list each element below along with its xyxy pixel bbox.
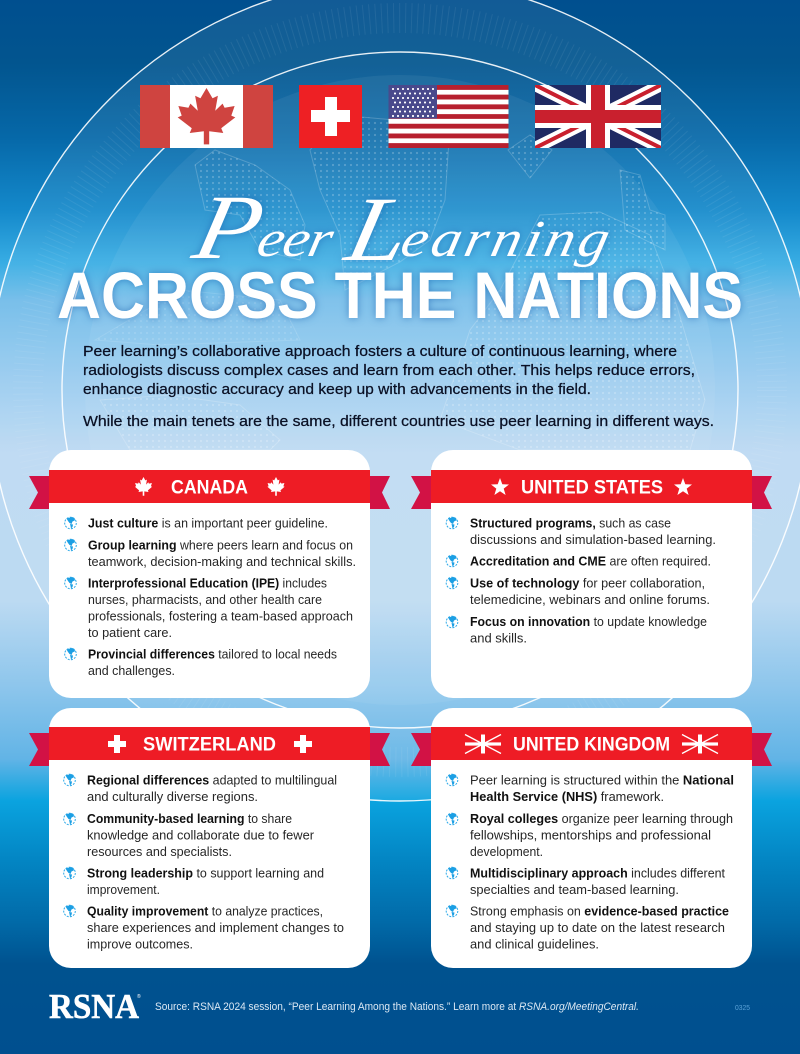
bullet: royal colleges: fellowships, mentorships and professional: [470, 828, 711, 842]
bullet: technology: telemedicine, webinars and online forums.: [470, 593, 710, 607]
bullet: technology: Use of technology for peer collaboration,: [470, 576, 705, 590]
title: ACROSS THE NATIONS: [57, 258, 743, 332]
flag: United States: [388, 85, 508, 148]
intro text: Peer learning’s collaborative approach fosters a culture of continuous learning, where: [83, 343, 677, 360]
script title line: earning: [396, 211, 619, 268]
globe backdrop with rings and dotted map: [0, 0, 800, 801]
bullet: provincial differences: [65, 648, 337, 678]
flag: United Kingdom: [535, 85, 661, 148]
logo: RSNA: ®: [137, 993, 141, 1000]
flag: Canada: [140, 85, 273, 148]
bullet: quality improvement: [64, 904, 344, 952]
title: [57, 176, 743, 332]
bullet: interprofessional education: [65, 576, 353, 640]
bullet: multidisciplinary approach: [446, 866, 725, 897]
script title line: L: [336, 178, 419, 280]
bullet: regional differences: Regional differences adapted to multilingual: [87, 774, 337, 788]
bullet: quality improvement: share experiences and implement changes to: [87, 921, 344, 935]
script title line: P: [184, 176, 273, 278]
bullet: strong leadership: [64, 866, 324, 897]
panel: United States: UNITED STATES: [521, 478, 663, 498]
bullet: strong leadership: improvement.: [87, 883, 160, 897]
icon: stars: [491, 478, 692, 495]
panel: Canada: [29, 450, 390, 698]
bullet: community-based learning: knowledge and collaborate due to fewer: [87, 828, 314, 842]
panel: Switzerland: SWITZERLAND: [143, 734, 276, 756]
bullet: group learning: teamwork, decision-making and technical skills.: [88, 555, 356, 569]
intro text: enhance diagnostic accuracy and keep up with advancements in the field.: [83, 381, 591, 398]
bullet: structured programs: Structured programs, such as case: [470, 516, 671, 530]
bullet: technology: [446, 576, 710, 607]
bullet: structured programs: [446, 516, 716, 547]
bullet: regional differences: and culturally diverse regions.: [87, 790, 258, 804]
bullet: quality improvement: Quality improvement to analyze practices,: [87, 904, 323, 918]
panel: United Kingdom: [411, 708, 772, 968]
panel: Switzerland: [29, 708, 390, 968]
panel: United States: [411, 450, 772, 698]
bullet: NHS framework: Peer learning is structured within the National: [470, 774, 734, 788]
bullet: innovation: and skills.: [470, 632, 527, 646]
intro text: radiologists discuss complex cases and learn from each other. This helps reduce errors,: [83, 362, 695, 379]
bullet: community-based learning: resources and specialists.: [87, 845, 232, 859]
bullet: royal colleges: Royal colleges organize peer learning through: [470, 812, 733, 826]
panel: Canada: CANADA: [171, 478, 248, 498]
bullet: community-based learning: Community-based learning to share: [87, 812, 292, 826]
bullet: NHS framework: Health Service (NHS) framework.: [470, 790, 664, 804]
bullet: accreditation: Accreditation and CME are often required.: [470, 554, 711, 568]
bullet: multidisciplinary approach: Multidisciplinary approach includes different: [470, 866, 725, 880]
panel: United Kingdom: UNITED KINGDOM: [513, 734, 670, 756]
bullet: evidence-based practice: Strong emphasis on evidence-based practice: [470, 904, 729, 918]
bullet: interprofessional education: to patient care.: [88, 626, 172, 640]
bullet: just culture: Just culture is an important peer guideline.: [88, 516, 328, 530]
bullet: royal colleges: development.: [470, 845, 543, 859]
bullet: evidence-based practice: and staying up to date on the latest research: [470, 921, 725, 935]
bullet: provincial differences: Provincial differences tailored to local needs: [88, 648, 337, 662]
source text: Source: RSNA 2024 session, “Peer Learning Among the Nations.” Learn more at RSNA.org/MeetingCentral.: [155, 1001, 639, 1013]
icon: union flags: [465, 734, 718, 754]
bullet: royal colleges: [446, 812, 733, 859]
bullet: group learning: Group learning where peers learn and focus on: [88, 538, 353, 552]
logo: RSNA: RSNA: [49, 987, 140, 1026]
issue code: 0325: [735, 1005, 750, 1012]
bullet: NHS framework: [446, 774, 734, 804]
icon: maple leaves: [135, 477, 285, 496]
intro text: While the main tenets are the same, different countries use peer learning in different ways.: [83, 413, 714, 430]
flag: Switzerland: [299, 85, 362, 148]
script title line: eer: [252, 211, 340, 268]
bullet: strong leadership: Strong leadership to support learning and: [87, 866, 324, 880]
bullet: evidence-based practice: and clinical guidelines.: [470, 938, 599, 952]
bullet: group learning: [65, 538, 356, 569]
bullet: innovation: [446, 615, 707, 646]
bullet: interprofessional education: Interprofessional Education (IPE) includes: [88, 576, 327, 590]
bullet: interprofessional education: nurses, pharmacists, and other health care: [88, 593, 322, 607]
bullet: innovation: Focus on innovation to update knowledge: [470, 615, 707, 629]
bullet: evidence-based practice: [446, 904, 729, 952]
bullet: community-based learning: [64, 812, 314, 859]
bullet: regional differences: [64, 774, 337, 804]
bullet: provincial differences: and challenges.: [88, 664, 175, 678]
bullet: structured programs: discussions and simulation-based learning.: [470, 533, 716, 547]
bullet: quality improvement: improve outcomes.: [87, 938, 193, 952]
icon: crosses: [108, 735, 312, 753]
bullet: multidisciplinary approach: specialties and team-based learning.: [470, 883, 679, 897]
bullet: interprofessional education: professionals, fostering a team-based approach: [88, 610, 353, 624]
intro text: [83, 343, 714, 430]
